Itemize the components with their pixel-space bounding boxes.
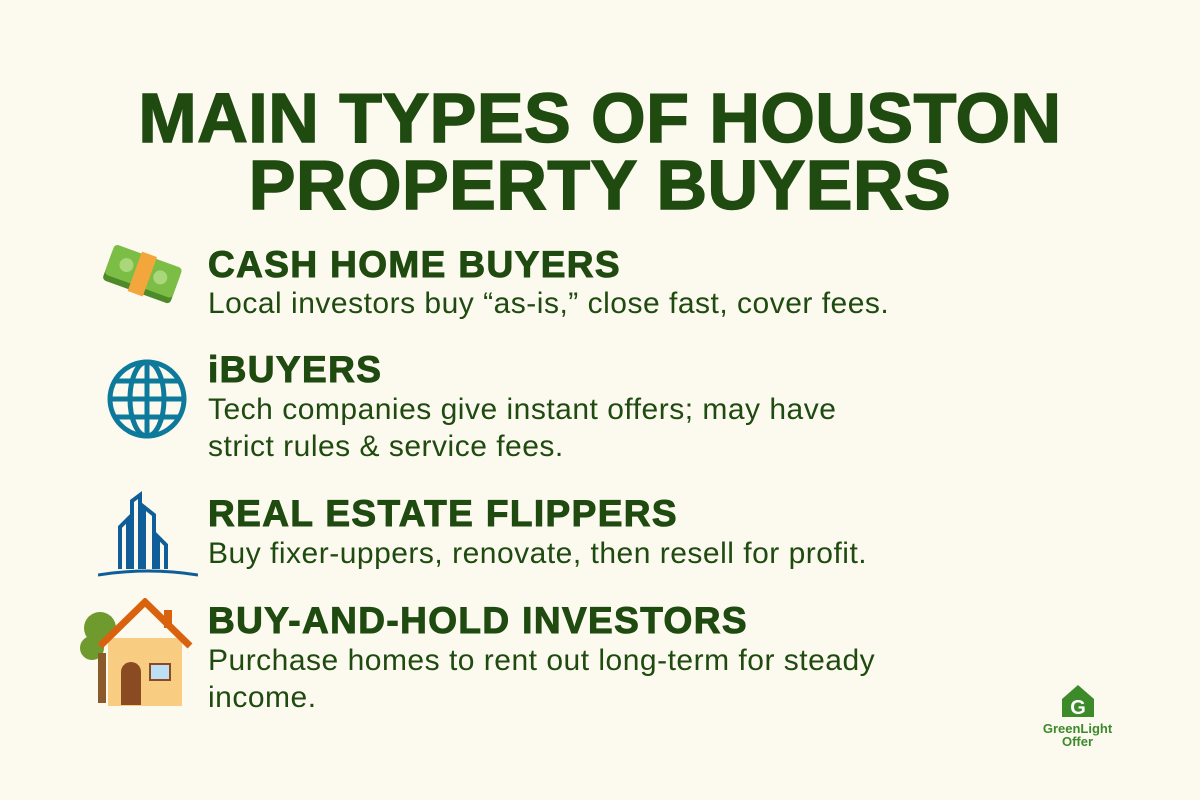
- logo: Offer: [1062, 734, 1093, 749]
- icon: house: [80, 598, 192, 706]
- icon: buildings: [98, 491, 198, 576]
- heading: cash home buyers: CASH HOME BUYERS: [208, 244, 621, 285]
- text: buy and hold: Purchase homes to rent out long-term for steady: [208, 644, 875, 677]
- heading: flippers: REAL ESTATE FLIPPERS: [208, 493, 678, 534]
- title: [138, 79, 1062, 224]
- text: ibuyers: [208, 393, 836, 463]
- text: buy and hold: [208, 644, 875, 714]
- icon: globe: [108, 360, 186, 438]
- text: buy and hold: income.: [208, 681, 317, 714]
- text: ibuyers: strict rules & service fees.: [208, 430, 564, 463]
- heading: buy and hold: BUY-AND-HOLD INVESTORS: [208, 600, 748, 641]
- text: flippers: Buy fixer-uppers, renovate, then resell for profit.: [208, 537, 867, 570]
- text: cash: Local investors buy “as-is,” close fast, cover fees.: [208, 287, 889, 320]
- logo: [1043, 685, 1112, 749]
- title: MAIN TYPES OF HOUSTON: [138, 79, 1062, 157]
- heading: ibuyers: iBUYERS: [208, 349, 382, 390]
- text: ibuyers: Tech companies give instant offers; may have: [208, 393, 836, 426]
- title: PROPERTY BUYERS: [249, 146, 951, 224]
- logo: GreenLight: [1043, 721, 1112, 736]
- icon: cash: [103, 245, 182, 304]
